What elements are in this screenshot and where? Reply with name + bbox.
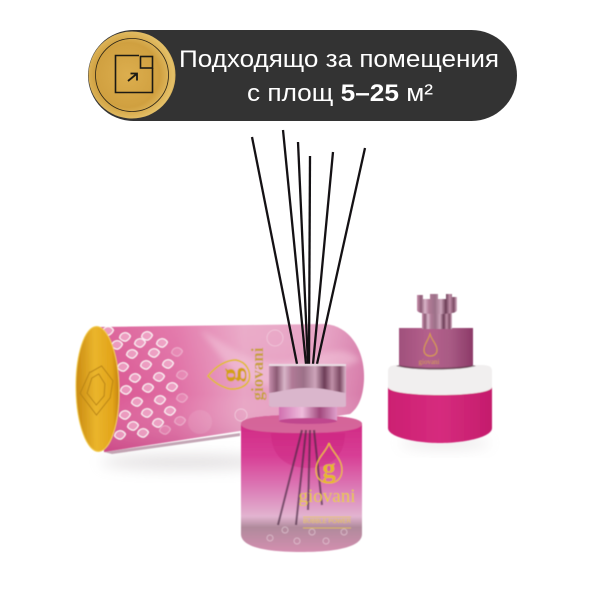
icon: expanding area <box>116 56 152 92</box>
bottle product name <box>303 517 352 528</box>
bottle glass <box>241 415 362 552</box>
lid stem <box>422 312 452 329</box>
product: diffuser bottle <box>241 364 362 552</box>
bottle logo drop: g <box>322 453 336 483</box>
badge background pill <box>88 30 517 121</box>
tube brand text: giovani <box>248 347 267 400</box>
heart pattern on tube <box>102 326 188 440</box>
badge text line 2: с площ 5–25 м² <box>247 80 433 107</box>
bottle logo drop <box>316 443 342 483</box>
product: opened lid stack <box>388 294 492 443</box>
inner liquid dome <box>271 433 345 468</box>
bottle product name: BUBBLE POWER <box>303 519 352 525</box>
reflected sticks <box>278 430 322 525</box>
badge text line 1: Подходящо за помещения <box>179 46 499 73</box>
reed sticks <box>252 130 365 364</box>
lid body <box>399 328 473 369</box>
tube logo <box>208 347 267 400</box>
bubble band dots at the base <box>267 527 347 544</box>
white band <box>388 365 492 395</box>
lid crown <box>417 294 457 314</box>
product: gift tube <box>75 324 364 454</box>
bottle brand text: giovani <box>298 486 356 507</box>
pink base <box>388 385 492 443</box>
tube logo: g <box>214 368 247 382</box>
bottle neck <box>279 405 337 421</box>
tube body <box>97 324 364 452</box>
tube golden open end <box>75 326 120 452</box>
tube swirl highlights <box>200 330 360 385</box>
gold medallion icon <box>88 32 176 118</box>
lid logo <box>424 334 437 356</box>
bottle metallic cap <box>269 364 346 407</box>
lid brand text: giovani <box>418 358 440 366</box>
badge: room size <box>88 30 517 121</box>
shadow under products <box>100 455 270 469</box>
